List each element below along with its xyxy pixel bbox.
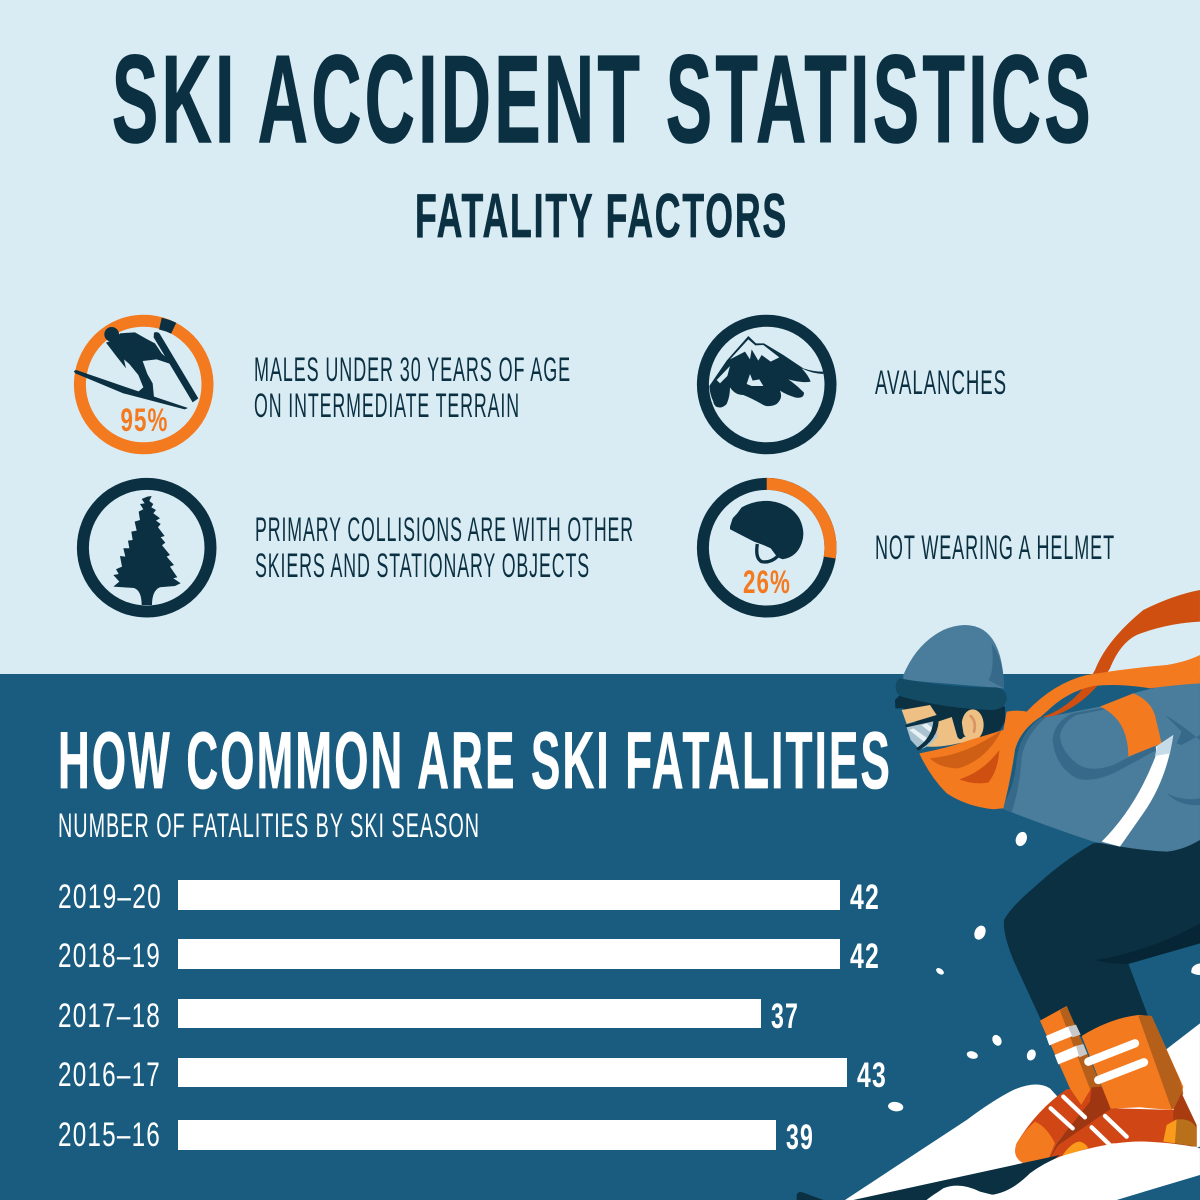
text: primary collisions: PRIMARY COLLISIONS ARE WITH OTHER [255, 511, 634, 549]
icon: ski jumper 95% ring: 95% [120, 402, 168, 438]
bar: 2017-18: 37 [771, 997, 799, 1036]
bar: 2018-19: 42 [850, 937, 880, 976]
bar: 2015-16: 2015–16 [58, 1116, 161, 1154]
bar: 2015-16: 39 [786, 1118, 814, 1157]
text: primary collisions: SKIERS AND STATIONARY OBJECTS [255, 547, 590, 585]
icon: helmet 26% ring: 26% [743, 564, 791, 600]
bar: 2018-19 [58, 937, 880, 976]
bar: 2016-17: 43 [857, 1056, 887, 1095]
text: avalanches: AVALANCHES [875, 364, 1007, 402]
illustration: skier [797, 590, 1200, 1200]
bar: 2017-18 [58, 997, 799, 1036]
icon: tree ring [83, 484, 210, 612]
text: primary collisions [255, 511, 634, 585]
bar: 2019-20: 42 [850, 878, 880, 917]
text: males under 30: MALES UNDER 30 YEARS OF AGE [254, 351, 571, 389]
bar: 2017-18: 2017–18 [58, 997, 161, 1035]
subheading: fatality factors: FATALITY FACTORS [415, 182, 788, 251]
bar: 2015-16 [58, 1116, 814, 1157]
bar: 2016-17: 2016–17 [58, 1056, 161, 1094]
lower body, boots and snow [797, 880, 1200, 1200]
icon: ski jumper 95% ring [74, 321, 208, 448]
text: males under 30 [254, 351, 571, 425]
icon: helmet 26% ring [703, 484, 830, 612]
bar: 2016-17 [58, 1056, 887, 1095]
bar chart [58, 878, 887, 1157]
chart subtitle: NUMBER OF FATALITIES BY SKI SEASON [58, 807, 480, 845]
bar: 2019-20 [58, 878, 880, 917]
upper body: head, scarf, jacket [895, 590, 1200, 900]
bar: 2019-20: 2019–20 [58, 878, 162, 916]
text: males under 30: ON INTERMEDIATE TERRAIN [254, 387, 520, 425]
bar: 2018-19: 2018–19 [58, 937, 161, 975]
icon: avalanche mountain ring [703, 321, 830, 448]
